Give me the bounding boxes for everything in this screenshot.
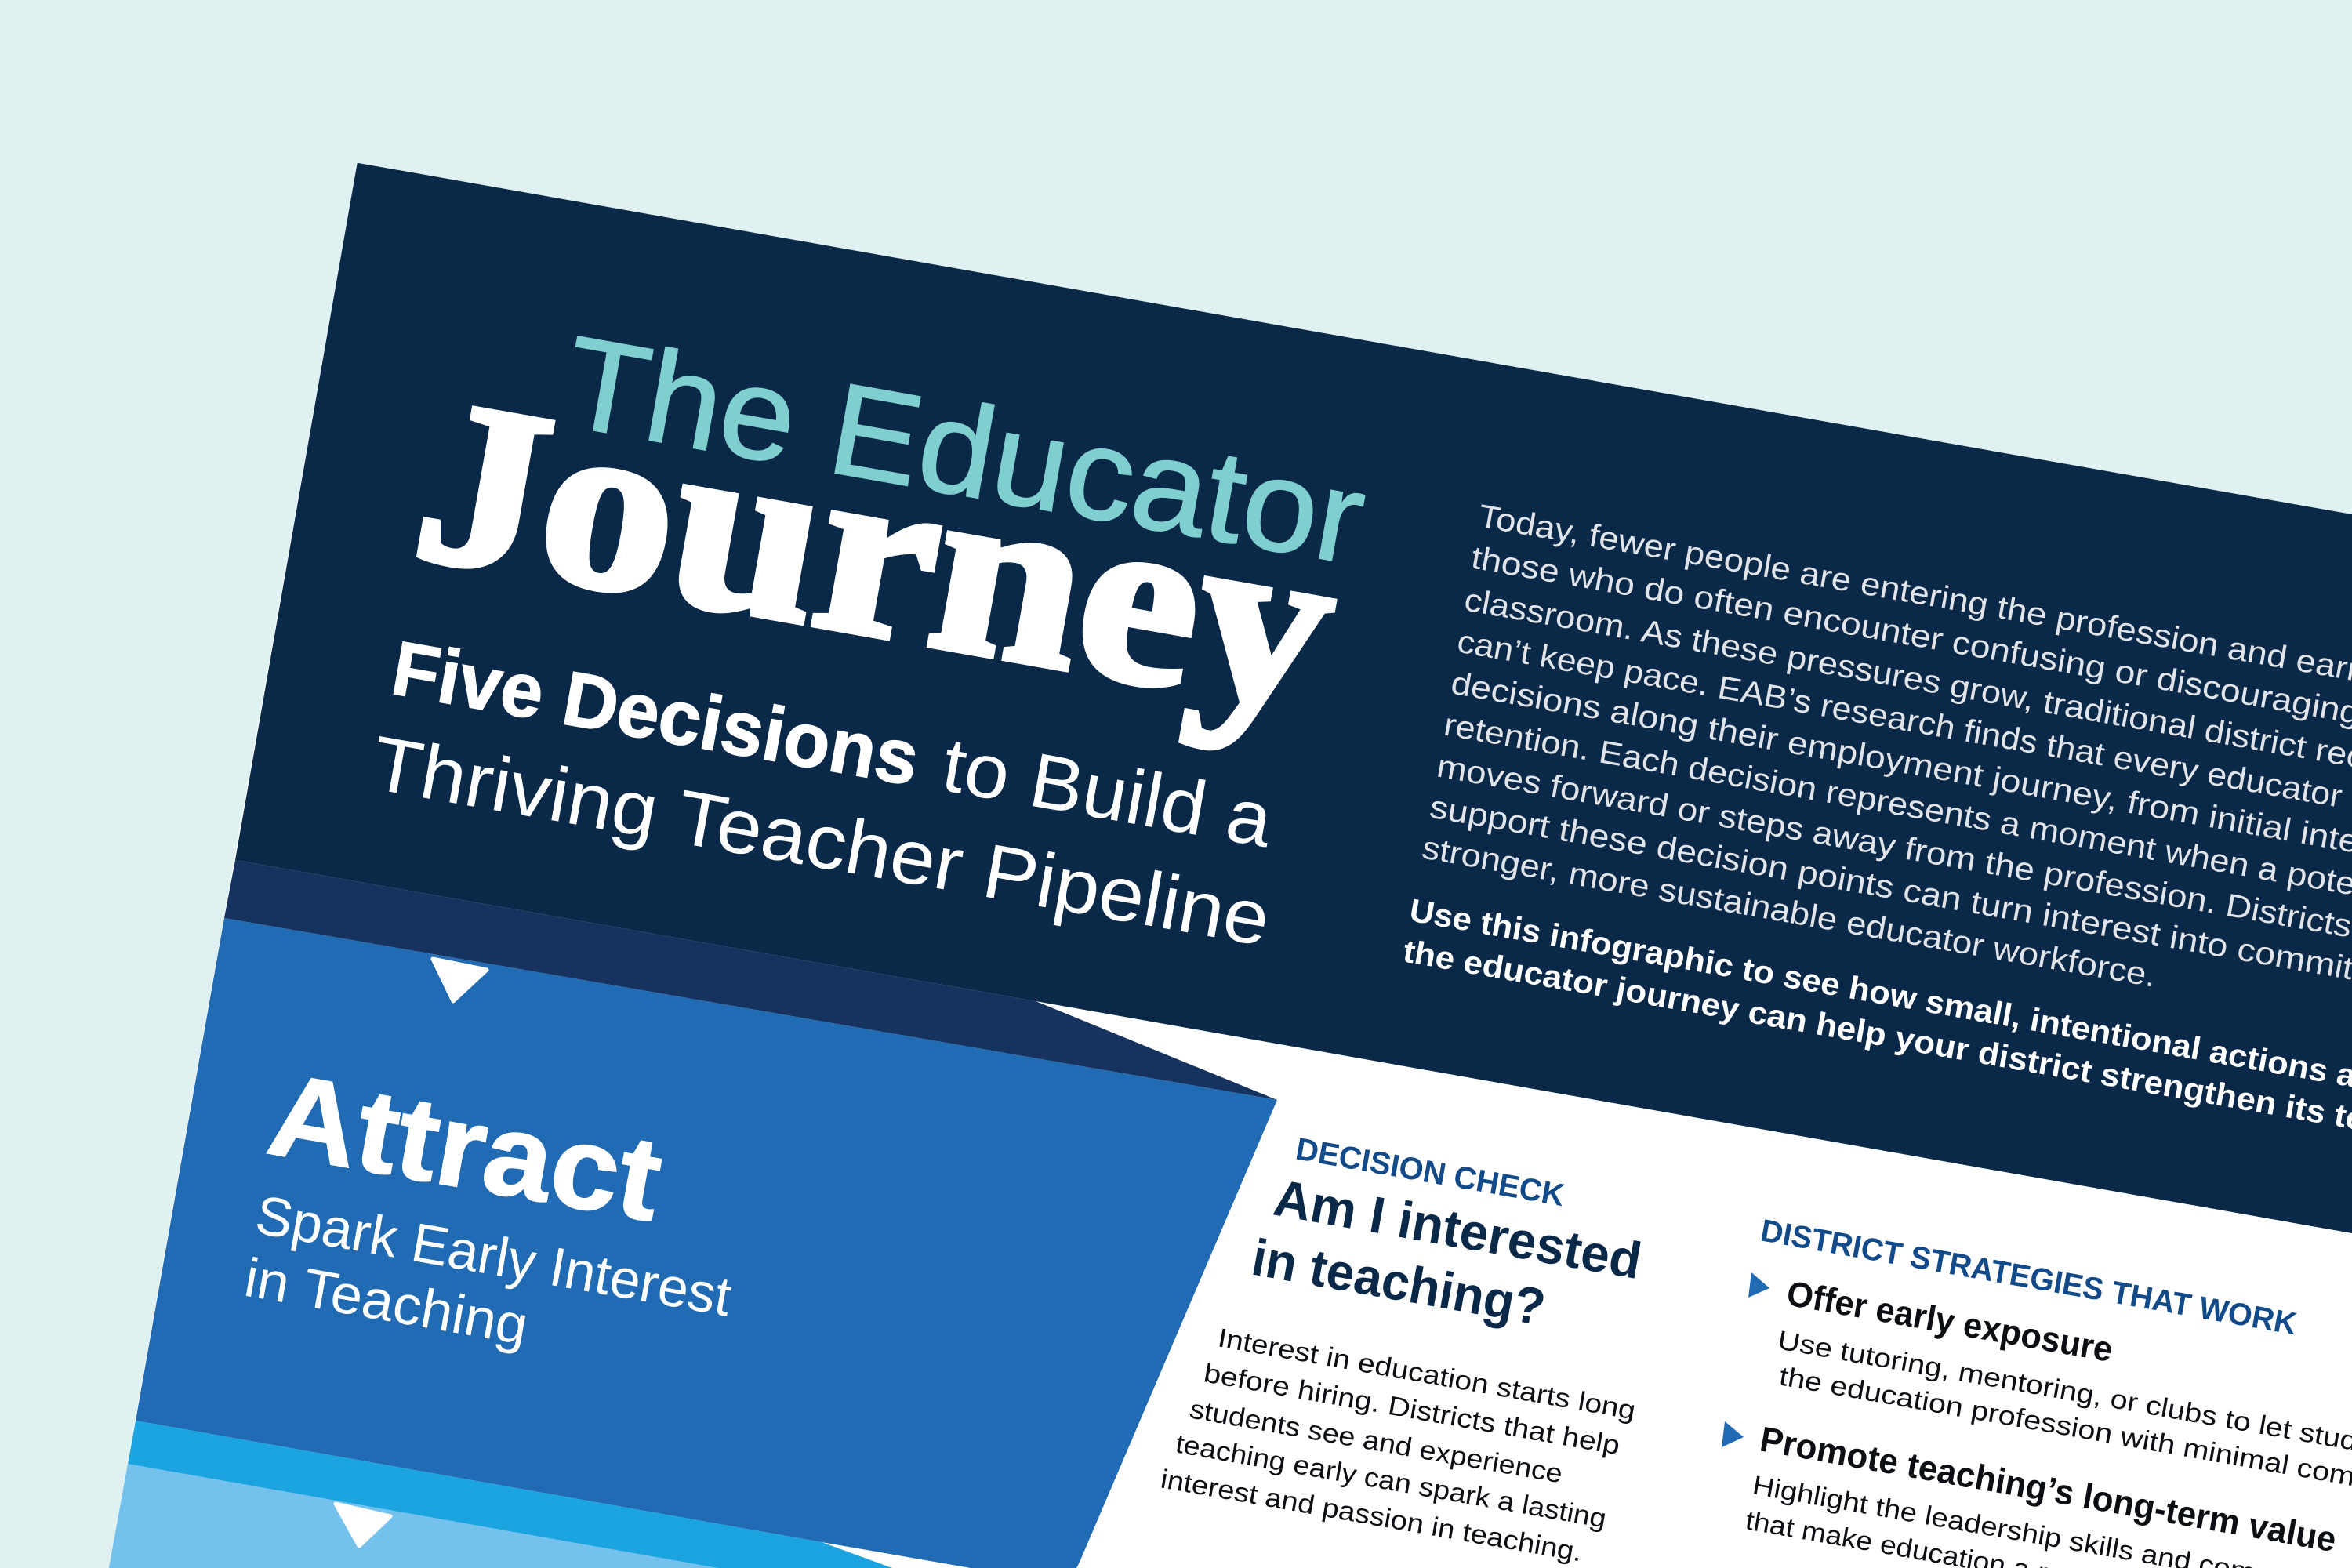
label: district strategies: DISTRICT STRATEGIES THAT WORK bbox=[1758, 1214, 2299, 1341]
question heading bbox=[1248, 1168, 1646, 1336]
strategy: offer early exposure: Use tutoring, mentoring, or clubs to let stud bbox=[1776, 1325, 2352, 1457]
title: The Educator: The Educator bbox=[554, 309, 1375, 592]
decision body text: before hiring. Districts that help bbox=[1202, 1358, 1622, 1461]
decision check column bbox=[1159, 1132, 1646, 1568]
intro paragraph bbox=[1419, 498, 2352, 994]
intro paragraph: classroom. As these pressures grow, traditional district rec bbox=[1461, 582, 2352, 775]
subheading: Spark Early Interest in Teaching: in Teaching bbox=[240, 1247, 532, 1356]
heading: Attract: Attract bbox=[260, 1047, 671, 1246]
panel: attract bbox=[136, 918, 1277, 1568]
intro paragraph: retention. Each decision represents a moment when a pote bbox=[1441, 706, 2352, 902]
intro paragraph: decisions along their employment journey, from initial inte bbox=[1448, 665, 2352, 860]
intro paragraph: can’t keep pace. EAB’s research finds that every educator bbox=[1454, 623, 2345, 815]
intro paragraph: stronger, more sustainable educator workforce. bbox=[1419, 829, 2159, 994]
subheading: Spark Early Interest in Teaching: Spark Early Interest bbox=[251, 1184, 736, 1327]
strategy: promote teaching: Promote teaching’s long-term value bbox=[1757, 1419, 2339, 1559]
question heading: in teaching? bbox=[1248, 1228, 1550, 1336]
band: attract tab shadow bbox=[224, 860, 1277, 1100]
band: next stage tab bbox=[109, 1421, 892, 1568]
subtitle bbox=[365, 624, 1279, 962]
decision body text: students see and experience bbox=[1188, 1394, 1565, 1490]
district strategies column bbox=[1722, 1214, 2352, 1568]
panel: next stage bbox=[109, 1464, 718, 1568]
icon: bullet arrow one bbox=[1748, 1272, 1769, 1298]
decision body text: interest and passion in teaching. bbox=[1159, 1464, 1584, 1568]
panel: header bbox=[235, 163, 2352, 1233]
decision body text bbox=[1159, 1323, 1638, 1568]
intro paragraph: support these decision points can turn interest into commit bbox=[1427, 789, 2352, 986]
intro paragraph: Today, fewer people are entering the profession and earn bbox=[1475, 498, 2352, 690]
attract heading bbox=[240, 1047, 736, 1356]
intro paragraph: moves forward or steps away from the profession. Districts bbox=[1434, 748, 2352, 944]
decision body text: Interest in education starts long bbox=[1216, 1323, 1638, 1426]
subtitle: to build a: to Build a bbox=[936, 720, 1279, 863]
strategy: offer early exposure: the education profession with minimal com bbox=[1777, 1361, 2352, 1492]
icon: bullet arrow two bbox=[1722, 1421, 1744, 1447]
intro call to action: Use this infographic to see how small, intentional actions a bbox=[1406, 892, 2352, 1094]
decision body text: teaching early can spark a lasting bbox=[1174, 1428, 1609, 1534]
title: Journey: J bbox=[401, 348, 568, 626]
icon: attract stage marker bbox=[433, 959, 487, 1001]
icon: next stage marker bbox=[336, 1504, 390, 1546]
intro call to action: the educator journey can help your district strengthen its te bbox=[1400, 933, 2352, 1138]
strategy: offer early exposure: Offer early exposure bbox=[1784, 1273, 2116, 1370]
question heading: Am I interested bbox=[1270, 1168, 1646, 1290]
title: Journey: ourney bbox=[522, 361, 1354, 765]
intro paragraph: those who do often encounter confusing or discouraging bbox=[1468, 539, 2352, 731]
strategy: offer early exposure bbox=[1776, 1273, 2352, 1492]
label: decision check: DECISION CHECK bbox=[1293, 1132, 1567, 1213]
title group bbox=[401, 309, 1375, 765]
subtitle: second line: Thriving Teacher Pipeline bbox=[365, 719, 1276, 962]
subtitle: bold part: Five Decisions bbox=[386, 624, 925, 802]
